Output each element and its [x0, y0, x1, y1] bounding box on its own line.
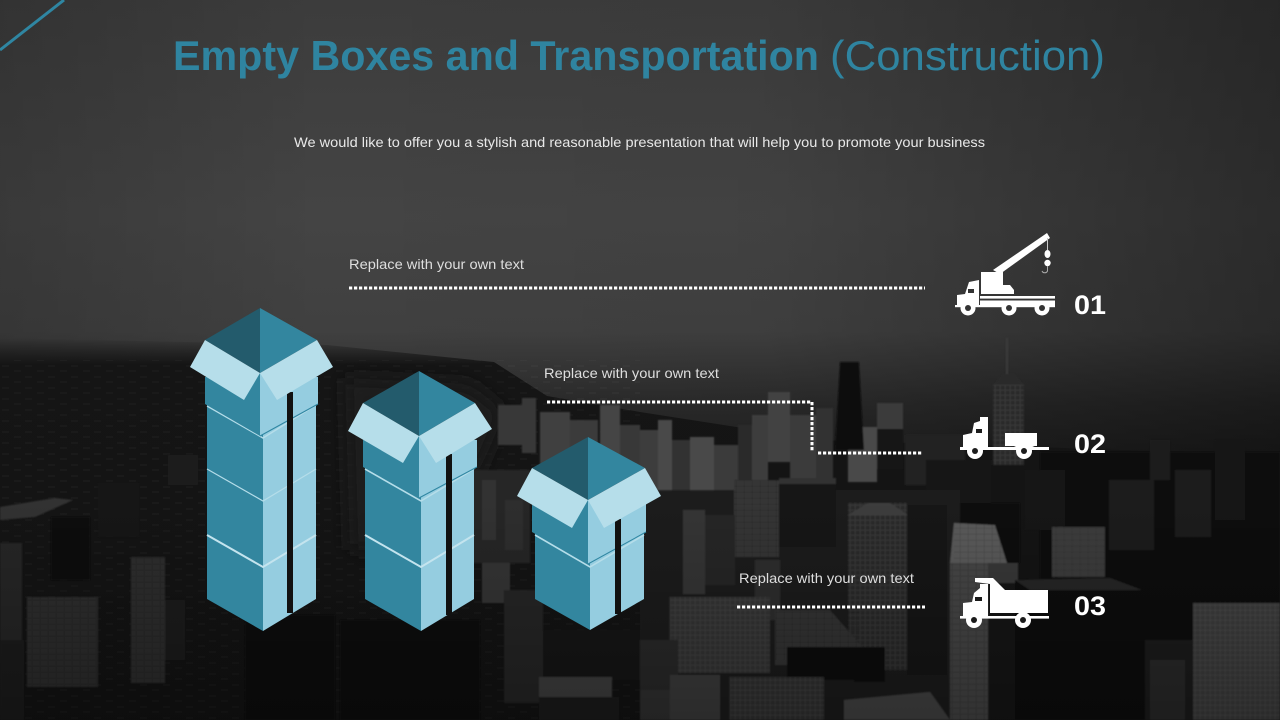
- icon: dump truck: [960, 578, 1049, 628]
- number 03: 03: [1074, 591, 1106, 621]
- label 3: Replace with your own text: [739, 570, 914, 586]
- title: Empty Boxes and Transportation: [173, 32, 819, 79]
- antenna tower: [993, 338, 1024, 465]
- subtitle: We would like to offer you a stylish and reasonable presentation that will help you to promote your business: [294, 134, 985, 150]
- Hancock tower: [835, 362, 864, 450]
- box stack 2: [348, 371, 492, 631]
- left city buildings: [0, 455, 670, 720]
- dotted leader 2: [547, 402, 923, 453]
- title: (Construction): [830, 32, 1105, 79]
- label 1: Replace with your own text: [349, 256, 524, 272]
- number 02: 02: [1074, 429, 1106, 459]
- box stack 3: [517, 437, 661, 630]
- label 2: Replace with your own text: [544, 365, 719, 381]
- mid city block fill: [640, 478, 1280, 720]
- dotted leader 1: [349, 286, 925, 290]
- corner accent line: [0, 0, 64, 50]
- number 01: 01: [1074, 290, 1106, 320]
- icon: crane truck: [955, 233, 1055, 316]
- far coast skyline: [473, 392, 965, 563]
- icon: flatbed truck: [960, 417, 1049, 459]
- box stack 1: [190, 308, 333, 631]
- right skyline dark: [926, 440, 1280, 720]
- dotted leader 3: [737, 606, 925, 608]
